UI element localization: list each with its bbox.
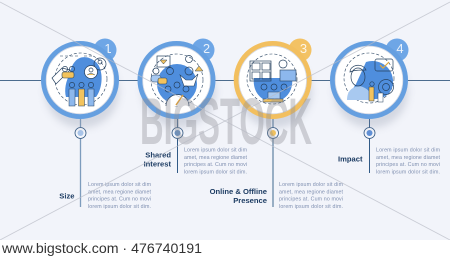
icon: community size <box>52 53 107 106</box>
text block: Online and Offline Presence: principes at. Cum no movi <box>279 197 343 203</box>
step 4 ring <box>332 44 406 116</box>
text block: Impact: Lorem ipsum dolor sit dim <box>376 148 441 154</box>
step 3 connector <box>268 85 278 207</box>
text block: Size: principes at. Cum no movi <box>88 197 151 203</box>
text block: Online and Offline Presence: Lorem ipsum dolor sit dim <box>279 182 344 188</box>
step 2 badge: 2 <box>203 41 210 56</box>
heading: Size: Size <box>59 192 74 200</box>
text block: Impact: principes at. Cum no movi <box>376 162 440 168</box>
text block: Online and Offline Presence: amet, mea regione diamet <box>279 189 344 195</box>
step 2 ring <box>140 44 213 116</box>
text block: Size: lorem ipsum dolor sit dim. <box>88 204 151 210</box>
step 3 badge: 3 <box>300 41 307 56</box>
icon: impact <box>344 53 394 103</box>
footer strip: www.bigstock.com · 476740191 <box>1 240 202 256</box>
step 3 ring <box>236 44 309 116</box>
text block: Size: Lorem ipsum dolor sit dim <box>88 182 152 188</box>
footer strip <box>0 240 450 260</box>
text block: Impact: amet, mea regione diamet <box>376 155 441 161</box>
text block: Shared Interest: amet, mea regione diamet <box>184 155 248 161</box>
step 4 connector <box>364 85 375 173</box>
heading: Online and Offline Presence: Online & Offline <box>210 187 267 196</box>
icon: online and offline presence <box>247 54 297 104</box>
step 1 badge: 1 <box>104 41 112 56</box>
step 3 <box>236 38 312 207</box>
text block: Online and Offline Presence: lorem ipsum dolor sit dim. <box>279 204 343 210</box>
step 1 <box>44 38 119 207</box>
text block: Size: amet, mea regione diamet <box>88 189 152 195</box>
text block: Shared Interest: lorem ipsum dolor sit dim. <box>184 170 247 176</box>
step 1 badge <box>94 38 116 62</box>
step 1 ring <box>44 44 116 116</box>
icon: shared interest <box>151 54 203 106</box>
horizontal timeline <box>0 80 450 82</box>
text block: Shared Interest: principes at. Cum no movi <box>184 162 247 168</box>
heading: Shared Interest: Interest <box>144 160 171 168</box>
heading: Online and Offline Presence: Presence <box>233 196 267 205</box>
step 4 <box>332 38 408 173</box>
step 3 badge <box>288 38 312 62</box>
step 4 badge: 4 <box>396 41 404 56</box>
step 2 <box>140 38 216 173</box>
step 2 connector <box>172 85 183 173</box>
heading: Impact: Impact <box>338 154 363 164</box>
text block: Impact: lorem ipsum dolor sit dim. <box>376 170 440 176</box>
heading: Shared Interest: Shared <box>145 150 171 160</box>
text block: Shared Interest: Lorem ipsum dolor sit dim <box>184 148 248 154</box>
step 1 connector <box>75 85 86 207</box>
